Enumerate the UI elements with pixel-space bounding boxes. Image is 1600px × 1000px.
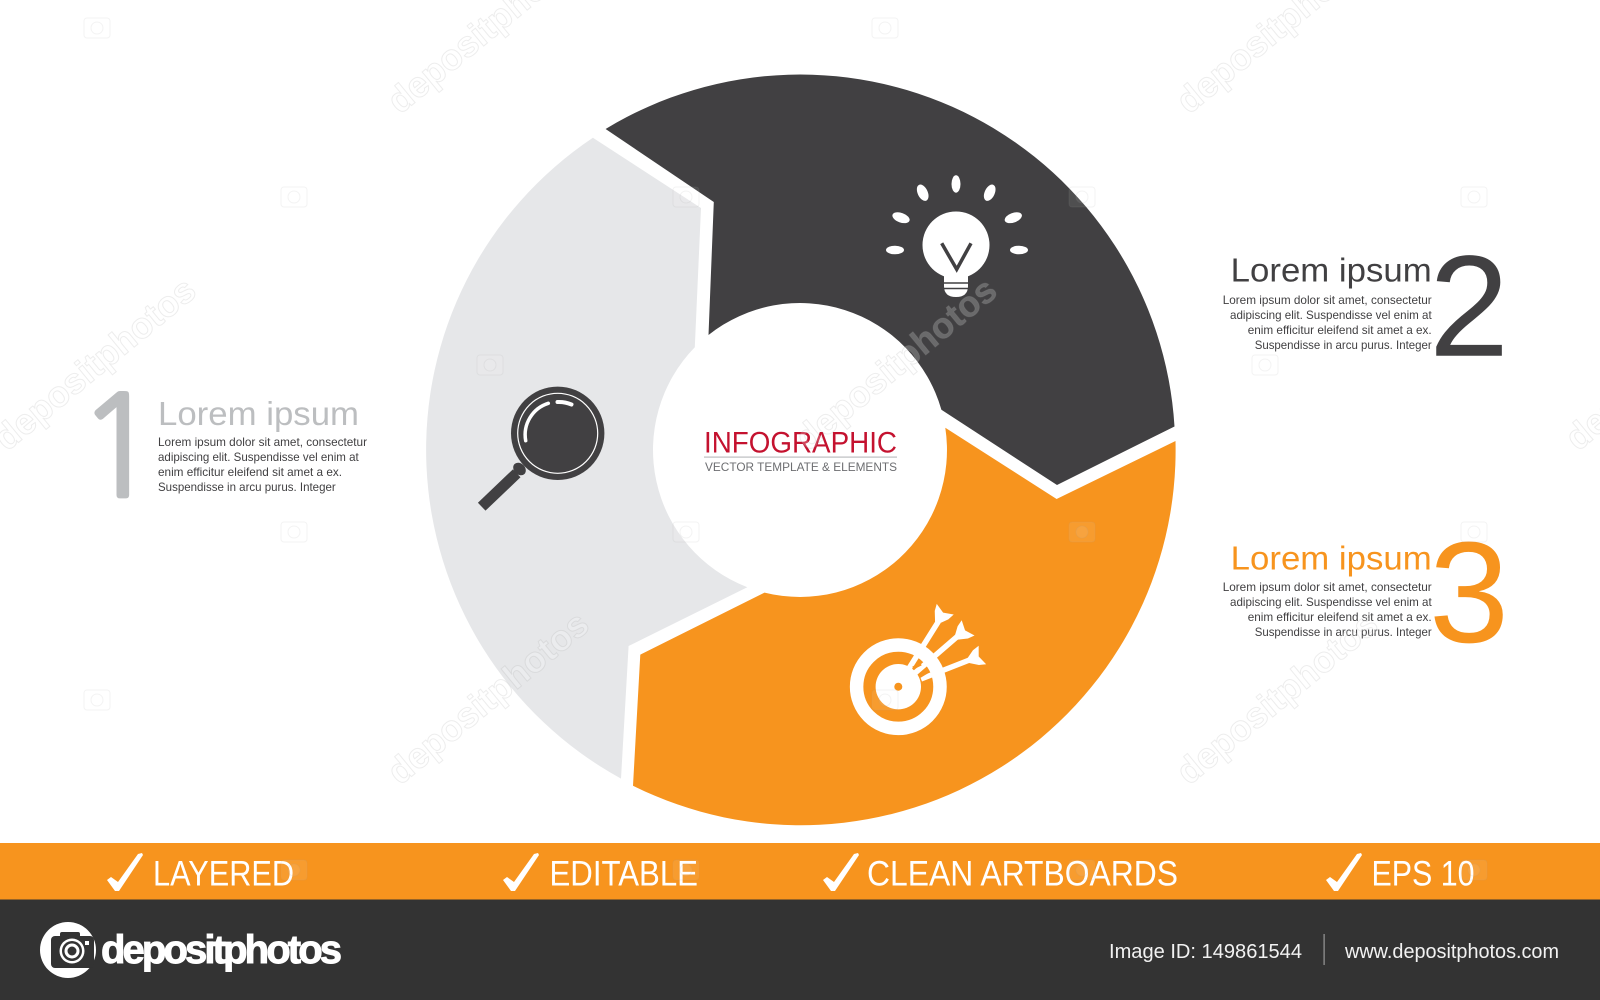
feature: clean artboards: CLEAN ARTBOARDS bbox=[867, 854, 1178, 894]
body 2: Suspendisse in arcu purus. Integer bbox=[1255, 338, 1432, 352]
logo wordmark: depositphotos bbox=[101, 928, 342, 972]
number 1: 1 bbox=[76, 378, 161, 518]
feature: editable bbox=[503, 853, 698, 894]
feature: layered bbox=[107, 853, 294, 894]
watermark: depositphotos bbox=[379, 603, 596, 792]
number 3: 3 bbox=[1429, 512, 1509, 673]
footer bar bbox=[0, 900, 1600, 1000]
feature: editable: EDITABLE bbox=[550, 854, 698, 894]
number 2: 2 bbox=[1429, 226, 1509, 387]
website: www.depositphotos.com bbox=[1344, 941, 1559, 963]
segment 1: light gray bbox=[426, 138, 747, 779]
watermark bbox=[0, 0, 1600, 792]
heading 2: Lorem ipsum bbox=[1231, 252, 1432, 289]
text block 3 bbox=[1223, 512, 1509, 673]
heading 1: Lorem ipsum bbox=[158, 395, 359, 432]
orange feature bar bbox=[0, 843, 1600, 900]
text block 1 bbox=[76, 378, 367, 518]
body 2 bbox=[1223, 293, 1432, 352]
feature: layered: LAYERED bbox=[153, 854, 294, 894]
icon: light bulb bbox=[886, 175, 1028, 297]
center label bbox=[704, 427, 897, 474]
heading 3: Lorem ipsum bbox=[1231, 540, 1432, 576]
body 3 bbox=[1223, 580, 1432, 639]
feature: eps 10 bbox=[1326, 853, 1474, 894]
subtitle: VECTOR TEMPLATE & ELEMENTS bbox=[705, 460, 897, 474]
donut chart bbox=[426, 75, 1176, 825]
image id: Image ID: 149861544 bbox=[1109, 941, 1302, 963]
body 2: Lorem ipsum dolor sit amet, consectetur bbox=[1223, 293, 1432, 307]
watermark: depositphotos bbox=[787, 269, 1004, 458]
body 3: Lorem ipsum dolor sit amet, consectetur bbox=[1223, 580, 1432, 594]
feature: eps 10: EPS 10 bbox=[1372, 854, 1474, 894]
body 1: adipiscing elit. Suspendisse vel enim at bbox=[158, 450, 359, 464]
body 1: enim efficitur eleifend sit amet a ex. bbox=[158, 465, 342, 479]
watermark: depositphotos bbox=[1168, 603, 1385, 792]
icon: magnifying glass bbox=[482, 387, 604, 507]
body 3: Suspendisse in arcu purus. Integer bbox=[1255, 625, 1432, 639]
body 2: adipiscing elit. Suspendisse vel enim at bbox=[1230, 308, 1432, 322]
body 3: enim efficitur eleifend sit amet a ex. bbox=[1248, 610, 1432, 624]
segment 3: orange bbox=[633, 428, 1176, 825]
logo camera icon bbox=[40, 922, 96, 978]
text block 2 bbox=[1223, 226, 1509, 387]
body 2: enim efficitur eleifend sit amet a ex. bbox=[1248, 323, 1432, 337]
icon: target with arrows bbox=[857, 604, 986, 728]
segment 2: dark bbox=[606, 75, 1174, 485]
title: INFOGRAPHIC: INFOGRAPHIC bbox=[704, 427, 897, 460]
body 1: Lorem ipsum dolor sit amet, consectetur bbox=[158, 435, 367, 449]
body 1 bbox=[158, 435, 367, 494]
body 1: Suspendisse in arcu purus. Integer bbox=[158, 480, 336, 494]
watermark camera marks bbox=[84, 18, 1487, 880]
body 3: adipiscing elit. Suspendisse vel enim at bbox=[1230, 595, 1432, 609]
